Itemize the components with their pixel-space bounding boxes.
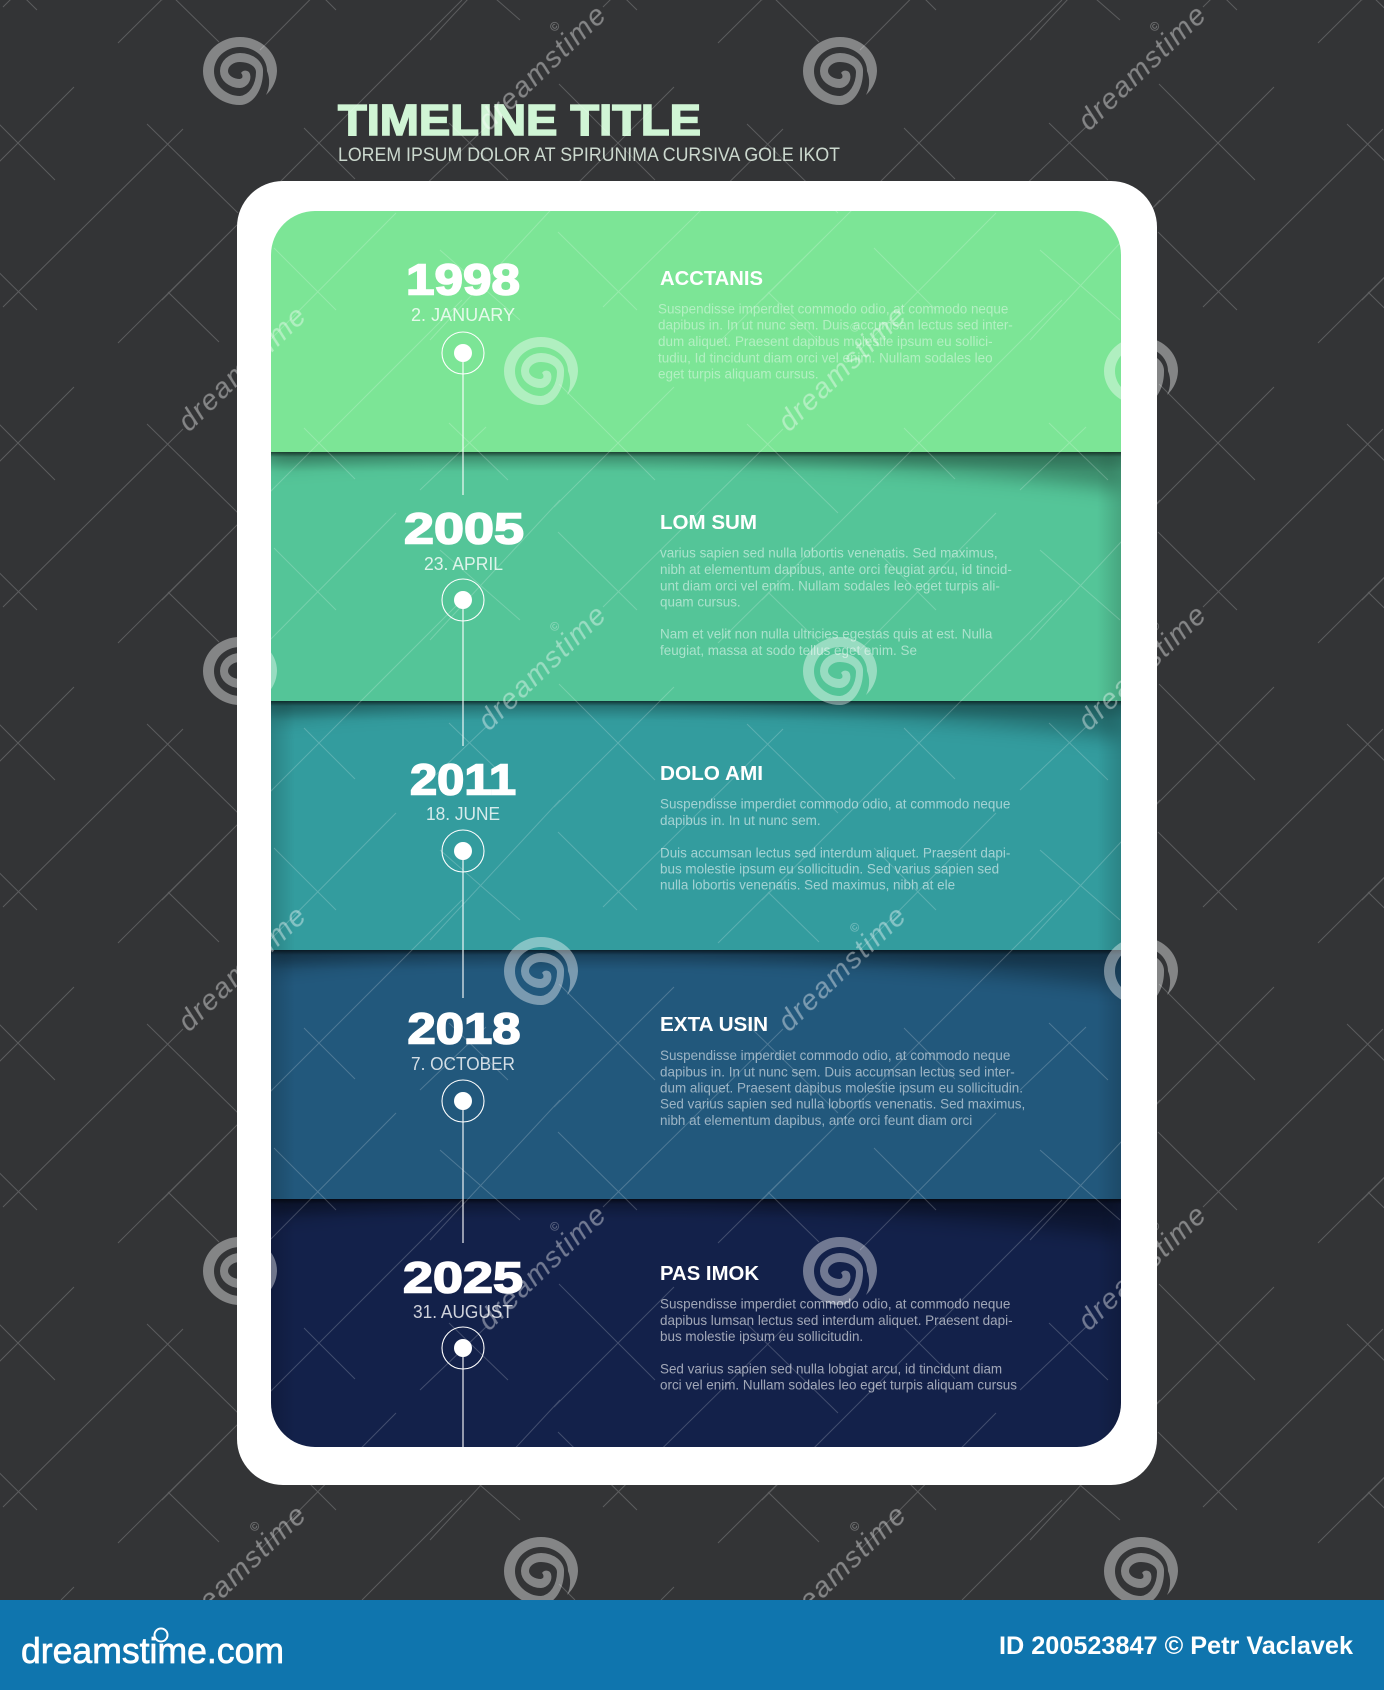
body text: quam cursus. xyxy=(660,594,741,610)
body text: eget turpis aliquam cursus. xyxy=(658,366,819,382)
date: 18. JUNE xyxy=(426,803,500,824)
watermark: dreamstime wordmarks: © xyxy=(247,919,263,936)
footer logo wordmark: dreamstime.com xyxy=(21,1630,284,1671)
body text: dum aliquet. Praesent dapibus molestie ipsum eu sollici- xyxy=(658,334,993,349)
subtitle: LOREM IPSUM DOLOR AT SPIRUNIMA CURSIVA GOLE IKOT xyxy=(338,145,840,166)
body text: feugiat, massa at sodo tellus eget enim. Se xyxy=(660,643,917,658)
watermark: dreamstime wordmarks: © xyxy=(1147,618,1163,635)
body text: orci vel enim. Nullam sodales leo eget turpis aliquam cursus xyxy=(660,1378,1017,1392)
watermark: dreamstime wordmarks: © xyxy=(247,319,263,336)
watermark: dreamstime wordmarks xyxy=(163,0,1212,1637)
marker dot xyxy=(454,842,472,860)
date: 31. AUGUST xyxy=(413,1301,513,1322)
watermark: dreamstime wordmarks: dreamstime xyxy=(472,0,612,137)
panel: timeline bands xyxy=(271,211,1121,1447)
marker ring xyxy=(442,579,484,621)
watermark: dreamstime wordmarks: dreamstime xyxy=(772,1499,912,1637)
body text: Nam et velit non nulla ultricies egestas quis at est. Nulla xyxy=(660,626,993,642)
band 3 curled shadow xyxy=(271,685,1121,950)
body text: bus molestie ipsum eu sollicitudin. xyxy=(660,1329,863,1344)
watermark: spirals xyxy=(203,37,1178,1605)
timeline entry: 2011 xyxy=(410,756,1010,998)
body text: Suspendisse imperdiet commodo odio, at commodo neque xyxy=(660,1296,1010,1312)
band 4 curled shadow xyxy=(271,934,1121,1199)
watermark: dreamstime wordmarks: © xyxy=(847,1518,863,1535)
marker dot xyxy=(454,1339,472,1357)
heading: DOLO AMI xyxy=(660,763,763,785)
watermark: dreamstime wordmarks: © xyxy=(847,319,863,336)
year: 1998 xyxy=(406,256,520,304)
body text: unt diam orci vel enim. Nullam sodales leo eget turpis ali- xyxy=(660,578,1000,594)
heading: ACCTANIS xyxy=(660,268,763,290)
timeline entry: 2025 xyxy=(403,1254,1017,1447)
timeline entry: 2018 xyxy=(408,1004,1025,1243)
panel: white card xyxy=(237,181,1157,1485)
watermark: dreamstime wordmarks: dreamstime xyxy=(472,1199,612,1337)
watermark: dreamstime wordmarks: © xyxy=(1147,1218,1163,1235)
footer credit: ID 200523847 © Petr Vaclavek xyxy=(999,1632,1353,1660)
connector line xyxy=(462,1101,464,1243)
band 5 background xyxy=(271,1199,1121,1447)
watermark: dreamstime wordmarks: © xyxy=(247,1518,263,1535)
band 5 curled shadow xyxy=(271,1199,1121,1430)
marker ring xyxy=(442,830,484,872)
watermark: dreamstime wordmarks: dreamstime xyxy=(172,300,312,438)
body text xyxy=(660,1296,1017,1392)
heading: PAS IMOK xyxy=(660,1263,760,1285)
watermark: dreamstime wordmarks: dreamstime xyxy=(772,300,912,438)
band 2 background xyxy=(271,452,1121,701)
watermark: dreamstime wordmarks: © xyxy=(847,919,863,936)
body text: dum aliquet. Praesent dapibus molestie ipsum eu sollicitudin. xyxy=(660,1080,1023,1096)
heading: EXTA USIN xyxy=(660,1014,768,1036)
watermark: dreamstime wordmarks: dreamstime xyxy=(172,1499,312,1637)
watermark: dreamstime wordmarks: © xyxy=(547,618,563,635)
body text xyxy=(658,302,1013,382)
band 4 background xyxy=(271,950,1121,1199)
date: 7. OCTOBER xyxy=(411,1053,515,1074)
marker dot xyxy=(454,1092,472,1110)
body text: dapibus lumsan lectus sed interdum aliquet. Praesent dapi- xyxy=(660,1313,1013,1328)
title: TIMELINE TITLE xyxy=(338,96,701,145)
year: 2018 xyxy=(408,1004,520,1054)
body text: dapibus in. In ut nunc sem. xyxy=(660,813,821,828)
body text xyxy=(660,796,1010,892)
body text xyxy=(660,1048,1025,1128)
body text: nulla lobortis venenatis. Sed maximus, nibh at ele xyxy=(660,878,955,892)
body text: varius sapien sed nulla lobortis venenatis. Sed maximus, xyxy=(660,546,998,560)
connector line xyxy=(462,1348,464,1447)
heading: LOM SUM xyxy=(660,512,757,534)
date: 2. JANUARY xyxy=(411,304,515,325)
watermark: dreamstime wordmarks: dreamstime xyxy=(772,900,912,1038)
band 3 background xyxy=(271,701,1121,950)
watermark: dreamstime wordmarks: dreamstime xyxy=(472,599,612,737)
body text: Suspendisse imperdiet commodo odio, at commodo neque xyxy=(660,796,1010,812)
marker dot xyxy=(454,591,472,609)
connector line xyxy=(462,600,464,746)
body text: nibh at elementum dapibus, ante orci feunt diam orci xyxy=(660,1113,972,1128)
watermark: dreamstime wordmarks: © xyxy=(547,18,563,35)
footer logo spiral xyxy=(154,1628,168,1642)
timeline entry: 2005 xyxy=(404,504,1012,746)
footer bar xyxy=(0,1600,1384,1690)
connector line xyxy=(462,851,464,998)
body text: Sed varius sapien sed nulla lobortis venenatis. Sed maximus, xyxy=(660,1096,1025,1112)
body text: Duis accumsan lectus sed interdum aliquet. Praesent dapi- xyxy=(660,846,1010,860)
year: 2011 xyxy=(410,756,516,804)
watermark: dreamstime wordmarks: dreamstime xyxy=(172,900,312,1038)
date: 23. APRIL xyxy=(424,553,503,574)
body text: Suspendisse imperdiet commodo odio, at commodo neque xyxy=(658,302,1008,316)
watermark: dreamstime wordmarks: dreamstime xyxy=(1072,1199,1212,1337)
body text: dapibus in. In ut nunc sem. Duis accumsan lectus sed inter- xyxy=(660,1064,1015,1080)
year: 2025 xyxy=(403,1254,523,1302)
body text: tudiu, Id tincidunt diam orci vel enim. Nullam sodales leo xyxy=(658,350,993,366)
watermark: dreamstime wordmarks: © xyxy=(547,1218,563,1235)
body text: Suspendisse imperdiet commodo odio, at commodo neque xyxy=(660,1048,1010,1063)
body text: dapibus in. In ut nunc sem. Duis accumsan lectus sed inter- xyxy=(658,318,1013,332)
band 1 background xyxy=(271,211,1121,452)
band 2 curled shadow xyxy=(271,436,1121,701)
body text: nibh at elementum dapibus, ante orci feugiat arcu, id tincid- xyxy=(660,562,1012,577)
marker ring xyxy=(442,332,484,374)
watermark: dreamstime wordmarks: dreamstime xyxy=(1072,0,1212,137)
timeline entry: 1998 xyxy=(406,256,1013,495)
marker dot xyxy=(454,344,472,362)
watermark: dreamstime wordmarks: dreamstime xyxy=(1072,599,1212,737)
year: 2005 xyxy=(404,504,524,554)
body text: bus molestie ipsum eu sollicitudin. Sed varius sapien sed xyxy=(660,862,999,876)
marker ring xyxy=(442,1080,484,1122)
connector line xyxy=(462,353,464,495)
marker ring xyxy=(442,1327,484,1369)
body text xyxy=(660,546,1012,658)
watermark: dreamstime wordmarks: © xyxy=(1147,18,1163,35)
body text: Sed varius sapien sed nulla lobgiat arcu, id tincidunt diam xyxy=(660,1362,1002,1376)
